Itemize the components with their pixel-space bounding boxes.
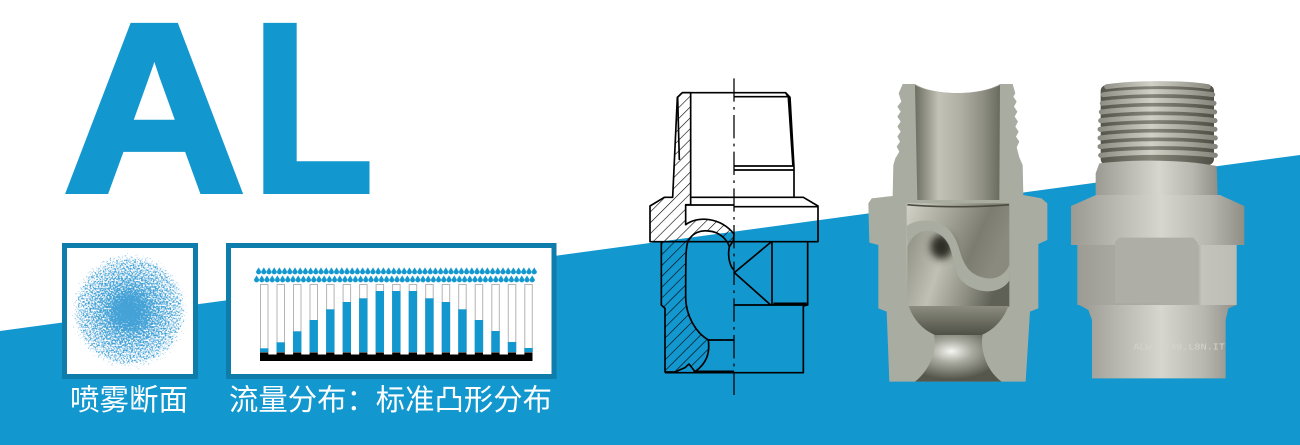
lower body: [1079, 305, 1237, 378]
chamber lower: [907, 231, 1009, 307]
collar: [1096, 161, 1218, 195]
label: flow distribution: 流量分布：标准凸形分布: [229, 384, 552, 417]
droplets row 2: [254, 275, 535, 283]
throat: [915, 335, 1002, 382]
outline: [661, 93, 818, 373]
lower bulge: [909, 306, 1008, 335]
blue diagonal background: [0, 155, 1300, 445]
panel: spray cross-section: [64, 246, 196, 376]
dark cavity shadow: [930, 234, 953, 259]
bar chart: [260, 284, 533, 354]
hex face: [1115, 238, 1198, 303]
panel: flow distribution: [228, 246, 554, 376]
threads: [1100, 84, 1215, 165]
cutaway body: [868, 84, 1047, 382]
base strip: [260, 352, 532, 361]
centre line: [732, 78, 736, 395]
engraved marking: ALW.2740.L8N.IT: [1133, 341, 1225, 352]
baffle: [907, 221, 1009, 291]
photo: nozzle exterior: [1071, 84, 1244, 378]
spray pattern: [70, 251, 190, 371]
droplets row 1: [256, 267, 537, 275]
label: spray cross-section: 喷雾断面: [70, 384, 188, 417]
photo: cutaway nozzle: [868, 84, 1047, 382]
chamber seam: [907, 205, 1009, 207]
bore: [915, 85, 1000, 200]
chamber upper: [907, 203, 1009, 283]
flange: [1071, 195, 1244, 245]
hatched section: [650, 93, 734, 372]
technical drawing: [650, 78, 818, 395]
title: AL: [63, 0, 373, 243]
hex section: [1077, 245, 1237, 305]
